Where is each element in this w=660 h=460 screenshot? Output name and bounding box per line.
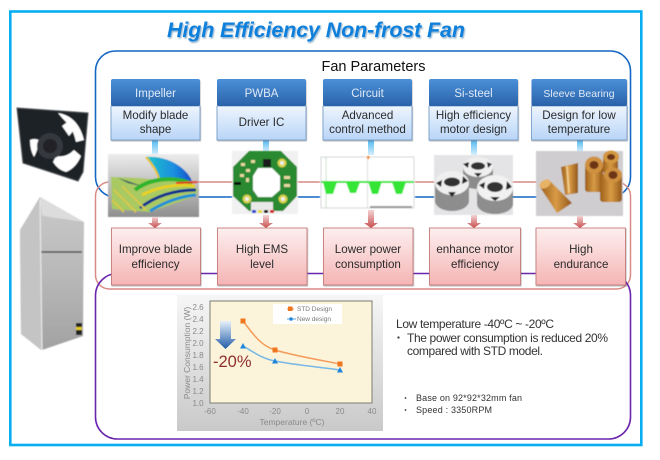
result: power consumption: Lower power bbox=[335, 243, 401, 256]
result: ems level bbox=[218, 228, 307, 285]
x axis title: Temperature (ºC) bbox=[260, 417, 325, 427]
card: circuit bbox=[323, 79, 412, 140]
x axis labels: 20 bbox=[336, 407, 345, 416]
panel: results outline bbox=[96, 182, 630, 289]
result: ems level: High EMS bbox=[236, 243, 288, 256]
result: blade efficiency bbox=[112, 228, 200, 285]
y axis labels: 1.4 bbox=[192, 375, 204, 384]
text block: low temperature summary: Low temperature -40ºC ~ -20ºC bbox=[396, 317, 554, 331]
connector: circuit bbox=[368, 140, 374, 155]
arrow: si-steel result bbox=[467, 215, 481, 228]
line: std design bbox=[240, 318, 342, 366]
text block: test conditions: Speed : 3350RPM bbox=[416, 405, 492, 415]
heading: fan parameters: Fan Parameters bbox=[322, 59, 425, 75]
legend: STD Design bbox=[297, 306, 332, 313]
connector: sleeve bearing bbox=[577, 140, 583, 152]
text block: low temperature summary bbox=[396, 317, 608, 358]
card: si-steel: Si-steel bbox=[454, 88, 493, 100]
image: impeller simulation bbox=[108, 154, 199, 217]
y axis title: Power Consumption (W) bbox=[182, 307, 192, 399]
result: endurance: endurance bbox=[554, 258, 608, 271]
connector: pwba bbox=[263, 140, 269, 152]
result: endurance: High bbox=[569, 243, 593, 256]
arrow: pwba result bbox=[259, 215, 273, 228]
callout: minus twenty percent: -20% bbox=[213, 353, 252, 371]
result: power consumption bbox=[324, 228, 413, 285]
x axis labels: 40 bbox=[368, 407, 377, 416]
card: sleeve bearing: temperature bbox=[548, 123, 610, 136]
y axis labels: 1.6 bbox=[192, 363, 204, 372]
card: circuit: Circuit bbox=[351, 88, 385, 100]
card: pwba: Driver IC bbox=[239, 116, 284, 129]
card: si-steel: motor design bbox=[440, 123, 507, 136]
result: motor efficiency: efficiency bbox=[451, 258, 499, 271]
image: circuit waveform bbox=[320, 156, 415, 210]
result: blade efficiency: efficiency bbox=[131, 258, 180, 271]
line: new design bbox=[240, 343, 343, 372]
y axis labels: 2.4 bbox=[192, 315, 204, 324]
card: impeller: Modify blade bbox=[123, 109, 188, 122]
card: impeller: shape bbox=[140, 123, 171, 136]
card: circuit: Advanced bbox=[342, 109, 393, 122]
result: blade efficiency: Improve blade bbox=[119, 243, 192, 256]
y axis labels bbox=[192, 303, 204, 408]
text block: test conditions: Base on 92*92*32mm fan bbox=[416, 393, 522, 403]
image: si-steel parts bbox=[434, 155, 513, 215]
arrow: reduction bbox=[215, 321, 236, 349]
icon: refrigerator photo bbox=[20, 197, 84, 350]
legend bbox=[273, 304, 342, 324]
icon: fan photo bbox=[17, 108, 88, 181]
arrow: impeller result bbox=[148, 217, 162, 228]
title: High Efficiency Non-frost Fan bbox=[167, 18, 465, 42]
y axis labels: 2.6 bbox=[192, 303, 204, 312]
card: sleeve bearing: Design for low bbox=[542, 109, 616, 122]
y axis labels: 2.0 bbox=[192, 339, 204, 348]
text block: low temperature summary: compared with STD model. bbox=[407, 344, 543, 358]
chart: power consumption vs temperature bbox=[177, 295, 383, 431]
y axis labels: 1.8 bbox=[192, 351, 204, 360]
x axis labels: -40 bbox=[237, 407, 249, 416]
card: impeller bbox=[111, 79, 200, 140]
y axis labels: 2.2 bbox=[192, 327, 204, 336]
panel: fan parameters outline bbox=[96, 51, 630, 197]
result: endurance bbox=[536, 228, 626, 285]
text block: low temperature summary: The power consumption is reduced 20% bbox=[407, 331, 608, 345]
image: pwba circuit board bbox=[232, 151, 298, 214]
connector: impeller bbox=[152, 140, 158, 155]
result: power consumption: consumption bbox=[335, 258, 401, 271]
x axis labels: -60 bbox=[204, 407, 216, 416]
y axis labels: 1.2 bbox=[192, 387, 204, 396]
card: sleeve bearing: Sleeve Bearing bbox=[543, 88, 615, 100]
panel: performance outline bbox=[96, 274, 630, 439]
x axis labels: 0 bbox=[305, 407, 310, 416]
card: si-steel bbox=[429, 79, 518, 140]
x axis labels: -20 bbox=[269, 407, 281, 416]
result: motor efficiency bbox=[430, 228, 520, 285]
y axis labels: 1.0 bbox=[192, 399, 204, 408]
arrow: bearing result bbox=[573, 216, 587, 228]
card: sleeve bearing bbox=[532, 79, 627, 140]
card: pwba: PWBA bbox=[245, 88, 279, 100]
text block: test conditions bbox=[405, 393, 522, 415]
card: pwba bbox=[217, 79, 306, 140]
legend: New design bbox=[297, 316, 331, 323]
card: impeller: Impeller bbox=[135, 88, 176, 100]
card: si-steel: High efficiency bbox=[436, 109, 511, 122]
connector: si-steel bbox=[471, 140, 477, 155]
image: sleeve bearings bbox=[536, 150, 623, 216]
arrow: circuit result bbox=[364, 210, 378, 228]
result: ems level: level bbox=[250, 258, 274, 271]
x axis labels bbox=[204, 407, 377, 416]
result: motor efficiency: enhance motor bbox=[436, 243, 514, 256]
card: circuit: control method bbox=[329, 123, 406, 136]
